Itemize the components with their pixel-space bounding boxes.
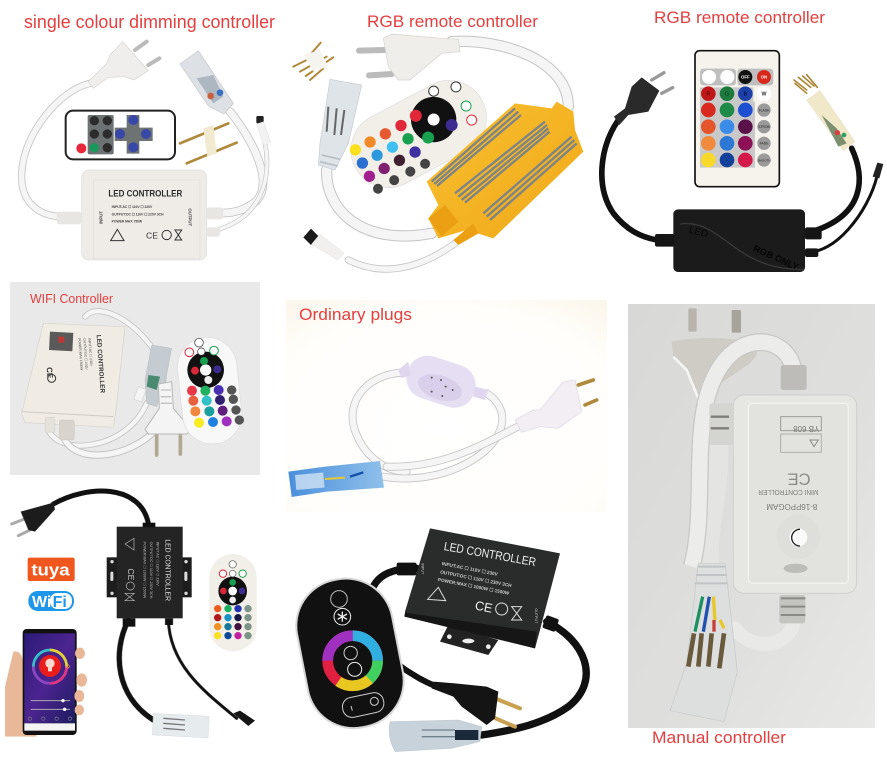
icon: rectangular remote with 24 keys: G bbox=[725, 92, 729, 98]
controller box: black: OUTPUT:DC ☐ 110V ☐ 230V 3CH bbox=[440, 569, 513, 588]
icon: plug bbox=[145, 382, 192, 455]
icon: strip connector bbox=[389, 720, 482, 752]
icon: mini connector bbox=[233, 711, 255, 726]
controller box: black with mounting ears: CE bbox=[126, 568, 136, 581]
controller box: black bbox=[655, 209, 822, 272]
strain reliefs bbox=[709, 365, 807, 623]
controller box: CE bbox=[146, 231, 158, 241]
icon: rectangular remote with 24 keys: W bbox=[761, 92, 767, 98]
icon: rectangular remote with 24 keys: B bbox=[744, 92, 748, 98]
icon: mini connector bbox=[873, 163, 883, 178]
controller box: white: LED CONTROLLER bbox=[95, 335, 106, 394]
controller box: grey-white: CE bbox=[788, 469, 811, 488]
icon: mini connector bbox=[303, 229, 344, 260]
logo: WiFi bbox=[28, 591, 74, 611]
controller box: black: RGB ONLY bbox=[752, 243, 801, 272]
icon: rectangular remote with 24 keys: R bbox=[706, 92, 710, 98]
heading: Ordinary plugs: Ordinary plugs bbox=[299, 306, 412, 324]
heading: RGB remote controller: RGB remote controller bbox=[367, 12, 538, 31]
icon: plug bbox=[515, 380, 597, 432]
icon: mini remote bbox=[66, 111, 175, 159]
icon: strip connector bbox=[180, 51, 233, 114]
icon: 4-pin strip connector bbox=[794, 75, 855, 151]
controller box: black: POWER:MAX ☐ 1000W ☐ 1500W bbox=[437, 577, 510, 596]
icon: rectangular remote with 24 keys: FADE bbox=[760, 142, 769, 146]
icon: 4-pin connector bbox=[293, 43, 333, 80]
controller box: black: CE bbox=[474, 599, 494, 616]
controller box: black with mounting ears: OUTPUT:DC ☐ 110V ☐ 230V 3CH bbox=[149, 542, 153, 599]
controller box: grey-white: 8-16PPOGAM bbox=[766, 502, 817, 511]
controller box: black with mounting ears: POWER:MAX ☐ 1000W ☐ 1500W bbox=[142, 542, 146, 599]
panel: RGB remote controller with yellow box bbox=[293, 12, 583, 269]
heading: Manual controller: Manual controller bbox=[652, 728, 786, 747]
icon: US plug bbox=[12, 503, 55, 536]
icon: plug bbox=[614, 73, 673, 125]
icon: mini connector bbox=[256, 116, 271, 147]
logo: WiFi: Wi bbox=[32, 594, 51, 611]
heading: RGB remote controller: RGB remote controller bbox=[654, 8, 825, 27]
icon: rectangular remote with 24 keys: OFF bbox=[741, 75, 750, 80]
controller box: white: POWER:MAX 1500W bbox=[77, 338, 84, 371]
controller box: LED CONTROLLER bbox=[108, 189, 183, 199]
icon: strip connector bbox=[134, 345, 172, 407]
icon: rectangular remote with 24 keys bbox=[695, 51, 779, 187]
controller box: black: INPUT bbox=[421, 563, 425, 575]
photo background bbox=[628, 304, 875, 728]
icon: strip connector bbox=[152, 713, 209, 738]
icon: rectangular remote with 24 keys: ON bbox=[761, 75, 767, 80]
panel: Tuya WiFi controller bbox=[5, 491, 257, 738]
icon: plug bbox=[88, 42, 159, 88]
panel: ordinary plugs bbox=[286, 300, 607, 512]
icon: rectangular remote with 24 keys: SMOOTH bbox=[757, 158, 771, 162]
icon: strip connector bbox=[318, 79, 362, 170]
controller box: OUTPUT:DC ☐ 110V ☐ 220V 3CH bbox=[112, 213, 164, 217]
controller box: grey-white bbox=[733, 395, 857, 593]
product photo: black RGB controller bbox=[602, 51, 883, 272]
icon: plug bbox=[359, 34, 460, 80]
controller box: INPUT:AC ☐ 110V ☐ 220V bbox=[112, 205, 153, 209]
logo: tuya bbox=[28, 558, 75, 581]
panel: single colour dimming controller bbox=[22, 12, 275, 260]
icon: hand holding phone bbox=[5, 629, 87, 737]
icon: plug bbox=[432, 682, 520, 727]
icon: plug bbox=[672, 308, 757, 398]
product photo: ordinary plug cable bbox=[288, 350, 597, 497]
logo: WiFi: Fi bbox=[53, 594, 67, 611]
product photo: yellow RGB controller bbox=[293, 34, 583, 269]
panel: RGB remote controller with black box bbox=[602, 8, 883, 272]
controller box: POWER MAX 750W bbox=[112, 220, 143, 224]
icon: oval remote bbox=[209, 554, 257, 651]
logo: tuya: tuya bbox=[31, 560, 70, 579]
panel: manual controller bbox=[628, 304, 875, 747]
controller box: black with mounting ears: INPUT:AC ☐ 110V ☐ 230V bbox=[156, 542, 160, 586]
product photo: WIFI controller bbox=[22, 311, 245, 455]
controller box: black: OUTPUT bbox=[534, 608, 538, 624]
icon: touch remote with rainbow ring bbox=[288, 570, 412, 736]
heading: single colour dimming controller: single colour dimming controller bbox=[24, 12, 275, 32]
controller box: grey-white: MINI CONTROLLER bbox=[758, 488, 818, 497]
icon: transparent connector with coloured wires bbox=[670, 563, 737, 722]
heading: WIFI Controller: WIFI Controller bbox=[30, 292, 113, 306]
icon: blue strip connector bbox=[288, 461, 384, 497]
controller box: yellow bbox=[427, 102, 583, 245]
product photo: manual controller bbox=[670, 308, 857, 722]
controller box: black with mounting ears: LED CONTROLLER bbox=[164, 539, 171, 601]
controller box: INPUT bbox=[99, 211, 104, 224]
controller box: white bbox=[22, 323, 125, 440]
controller box: black: INPUT:AC ☐ 110V ☐ 230V bbox=[441, 561, 499, 577]
controller box: black: LED bbox=[688, 225, 709, 240]
lower cable bbox=[735, 623, 793, 644]
controller box: white: OUTPUT:DC ☐ 230V bbox=[82, 338, 89, 371]
icon: oval remote bbox=[175, 335, 245, 447]
product photo: single colour controller bbox=[22, 42, 271, 260]
controller box: black with mounting ears bbox=[107, 523, 192, 627]
panel: black touch remote controller bbox=[288, 528, 586, 752]
controller box: OUTPUT bbox=[187, 208, 192, 226]
photo background bbox=[286, 300, 607, 512]
controller box bbox=[57, 170, 223, 260]
controller box: white: INPUT:AC ☐ 230V bbox=[87, 338, 93, 367]
controller box: white: CE bbox=[45, 367, 54, 379]
icon: gold pin connector bbox=[180, 123, 237, 163]
controller box: black bbox=[397, 528, 560, 655]
icon: rectangular remote with 24 keys: FLASH bbox=[759, 108, 770, 112]
panel: WIFI controller bbox=[10, 282, 260, 475]
icon: oval remote bbox=[338, 67, 500, 201]
photo background bbox=[10, 282, 260, 475]
controller box: black: LED CONTROLLER bbox=[443, 539, 537, 569]
icon: inline rectifier bbox=[398, 350, 488, 413]
icon: rectangular remote with 24 keys: STROB bbox=[758, 125, 771, 129]
controller box: grey-white: YB 608 bbox=[793, 424, 819, 433]
